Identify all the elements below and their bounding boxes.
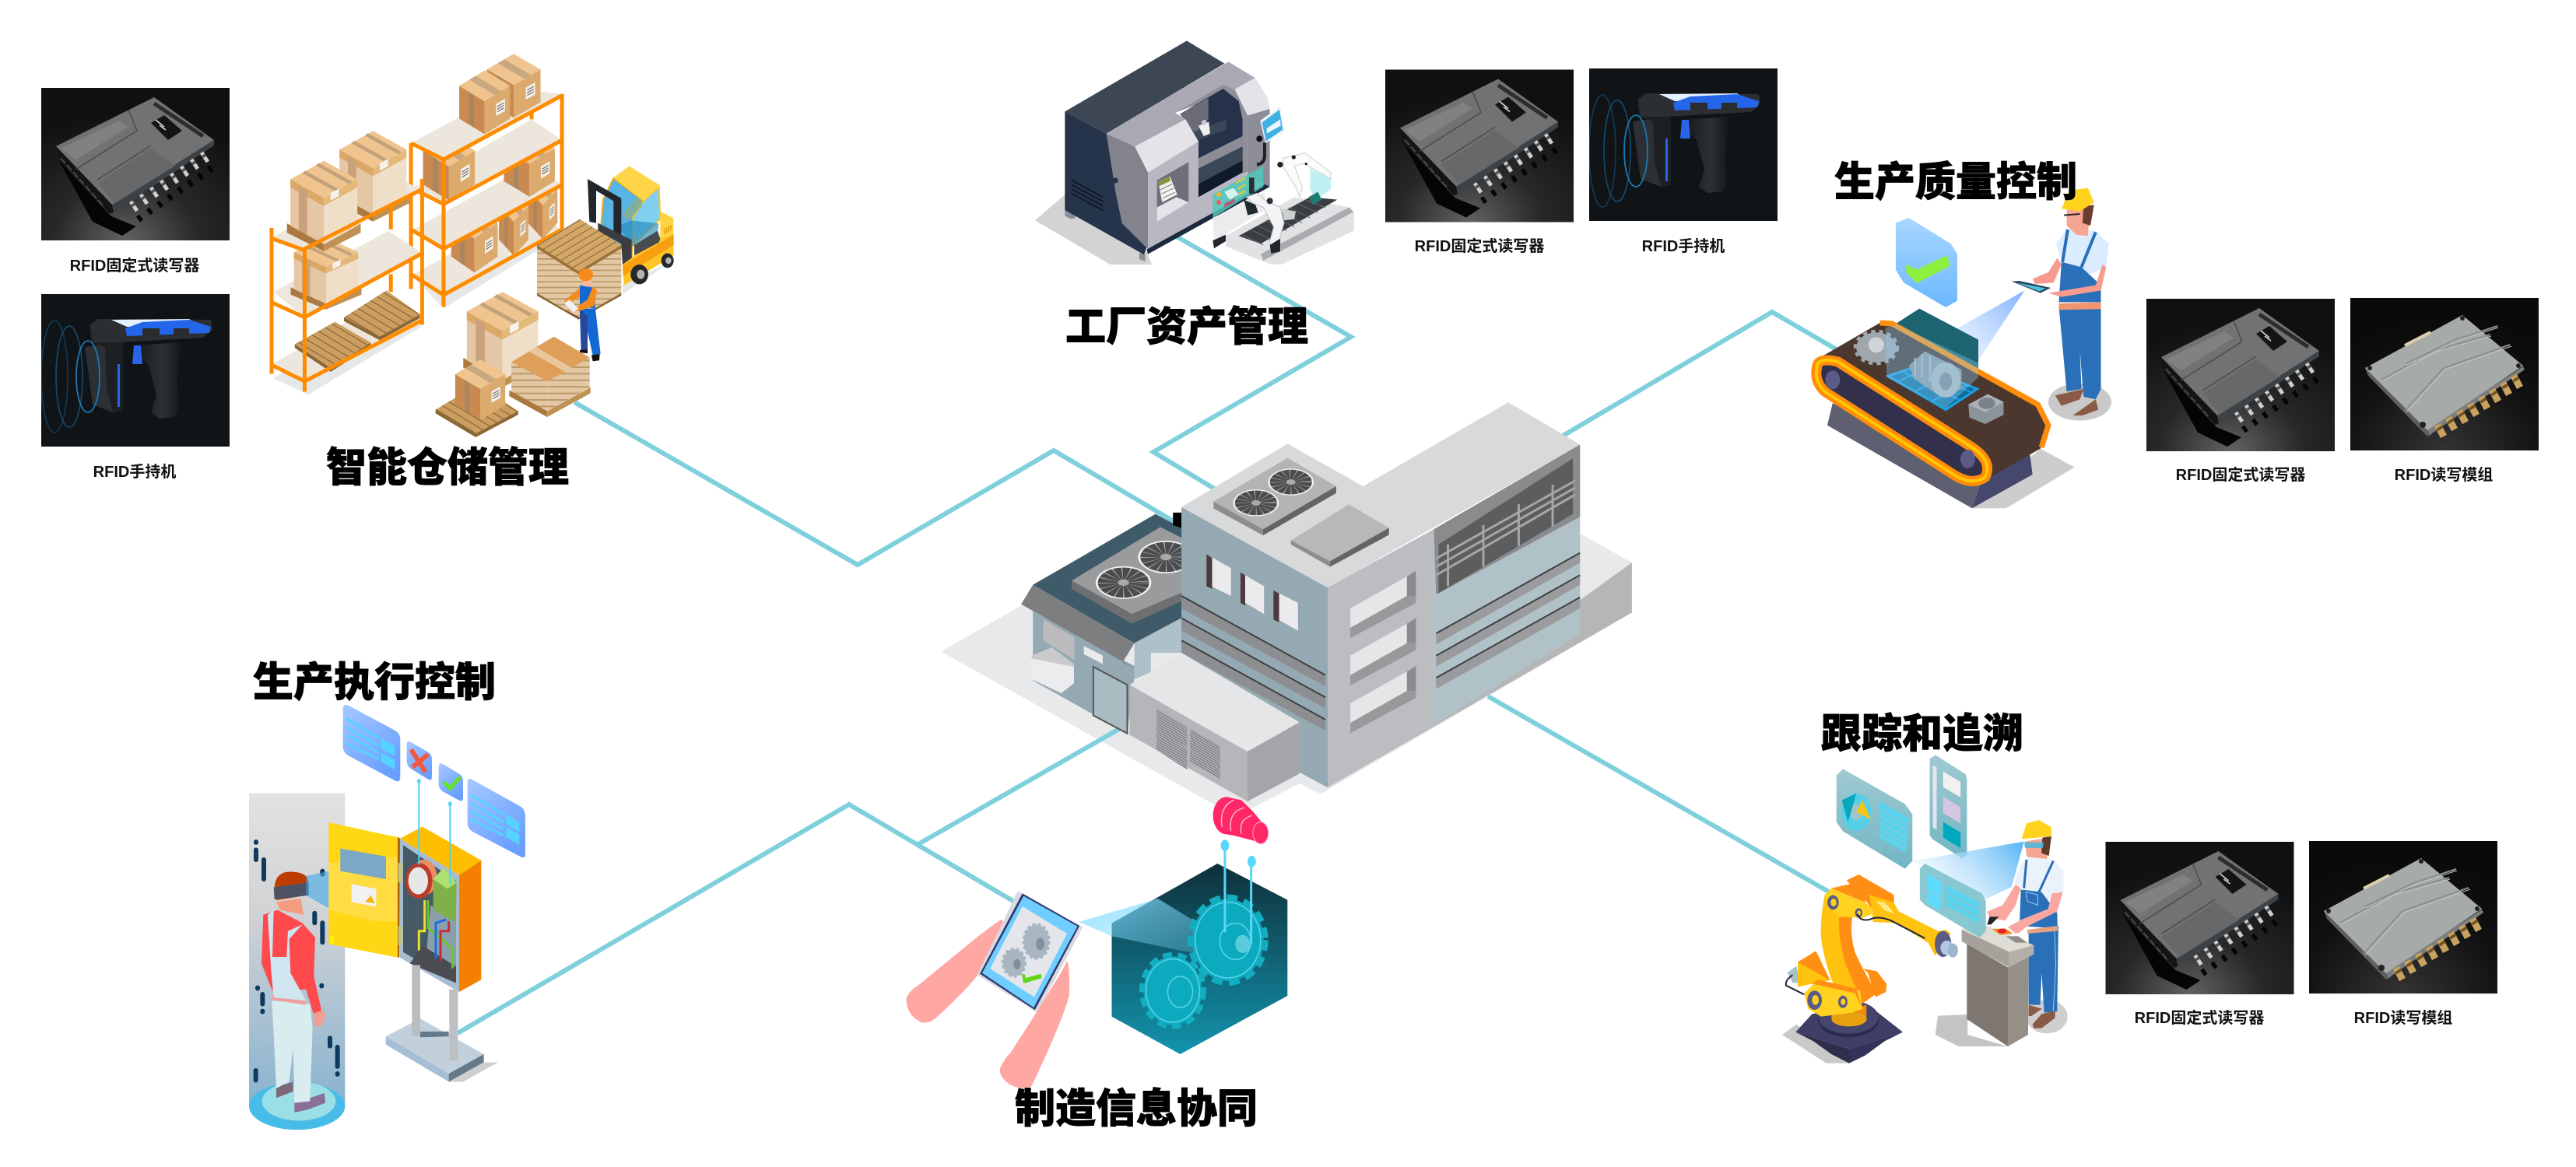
warehouse worker xyxy=(564,268,601,361)
product card: handheld xyxy=(41,294,230,481)
illustration: forklift with pallet xyxy=(537,166,675,361)
product card: fixed reader: RFID固定式读写器 xyxy=(1415,237,1544,255)
annex block xyxy=(1129,653,1300,801)
product card: handheld: RFID手持机 xyxy=(1642,237,1725,255)
title: smart warehouse: 智能仓储管理 xyxy=(326,446,569,491)
product card: reader module: RFID读写模组 xyxy=(2395,466,2493,484)
main building xyxy=(1181,402,1580,787)
building ground plate xyxy=(941,534,1632,817)
title: execution control: 生产执行控制 xyxy=(253,661,496,706)
illustration: technician and electric cabinet xyxy=(249,779,498,1130)
illustration: translucent console screen xyxy=(1920,864,1986,937)
title: traceability: 跟踪和追溯 xyxy=(1821,712,2023,757)
product card: fixed reader xyxy=(2106,842,2294,1027)
product card: fixed reader: RFID固定式读写器 xyxy=(70,256,199,275)
panel: manufacturing information collaboration xyxy=(906,797,1287,1132)
illustration: warehouse racks xyxy=(272,54,562,394)
product card: fixed reader: RFID固定式读写器 xyxy=(2135,1008,2264,1027)
title: quality control: 生产质量控制 xyxy=(1834,160,2077,205)
product card: fixed reader xyxy=(2146,299,2335,484)
panel: central factory building xyxy=(1021,402,1580,801)
illustration: CNC machine and conveyor xyxy=(1035,40,1354,265)
illustration: floor stacks xyxy=(436,292,591,437)
product card: reader module: RFID读写模组 xyxy=(2354,1009,2452,1027)
panel: production execution control xyxy=(249,661,525,1130)
product card: handheld: RFID手持机 xyxy=(93,463,176,481)
product card: fixed reader xyxy=(41,88,230,275)
product card: handheld xyxy=(1589,68,1778,255)
panel: production quality control xyxy=(1816,160,2539,508)
product card: fixed reader xyxy=(1385,70,1574,255)
title: collaboration: 制造信息协同 xyxy=(1015,1087,1258,1132)
product card: fixed reader: RFID固定式读写器 xyxy=(2176,465,2305,484)
illustration: robot arm, console and worker xyxy=(1782,857,2068,1064)
low left building xyxy=(1021,513,1194,734)
floating data panels xyxy=(343,705,525,857)
panel: factory asset management xyxy=(1035,40,1778,350)
product card: reader module xyxy=(2350,298,2539,484)
connector lines xyxy=(458,236,1848,1033)
illustration: tablet, hands and gears xyxy=(906,797,1287,1088)
illustration: data panels and worker head xyxy=(1837,755,2051,900)
panel: tracking and traceability xyxy=(1782,712,2497,1064)
title: factory asset: 工厂资产管理 xyxy=(1065,305,1308,350)
product card: reader module xyxy=(2309,841,2497,1027)
illustration: inspection conveyor and worker xyxy=(1816,188,2111,508)
panel: smart warehouse management xyxy=(41,54,675,491)
